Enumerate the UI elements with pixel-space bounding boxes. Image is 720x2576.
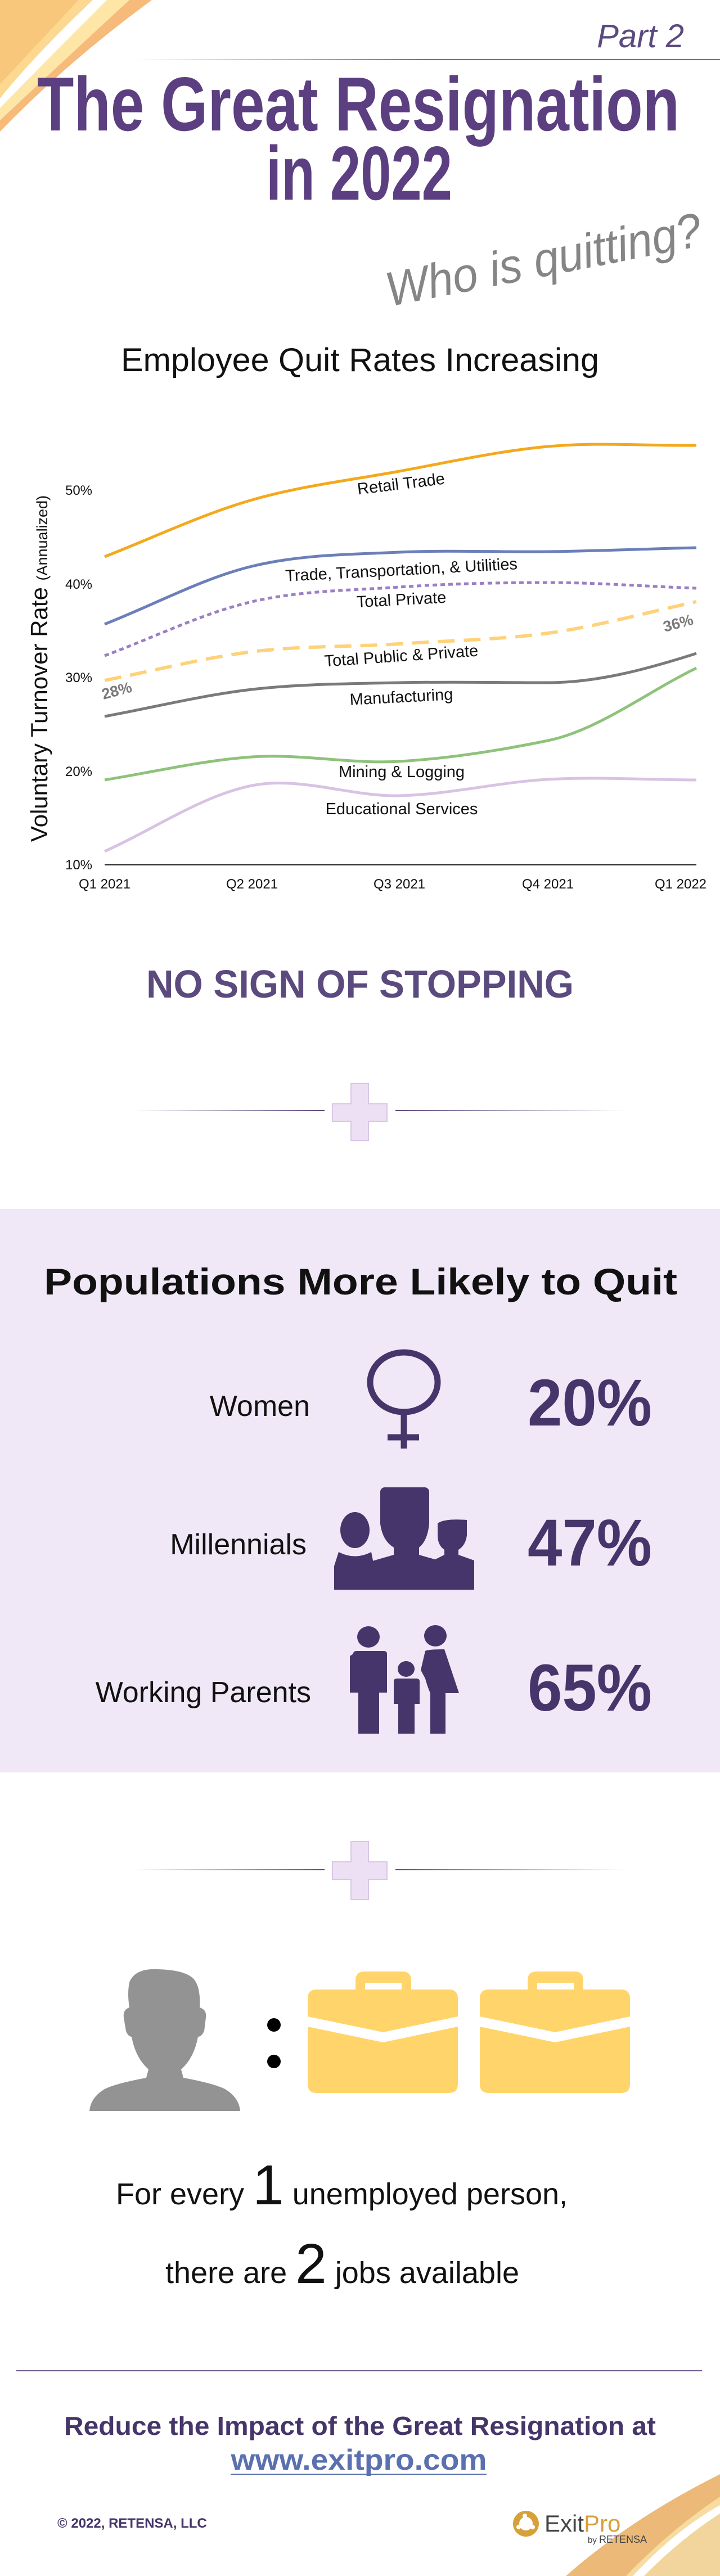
series: total public private — [105, 602, 696, 680]
x axis labels — [79, 877, 706, 892]
row: women — [210, 1352, 652, 1449]
series labels: Manufacturing — [349, 685, 453, 709]
series labels: 36% — [662, 611, 695, 635]
divider plus 1 — [133, 1084, 624, 1140]
icon: colon — [267, 2018, 281, 2068]
title — [37, 61, 680, 216]
footer copyright: © 2022, RETENSA, LLC — [57, 2516, 207, 2531]
series labels: 28% — [100, 679, 134, 703]
chart heading: Employee Quit Rates Increasing — [121, 342, 599, 378]
row: women: Women — [210, 1390, 310, 1423]
series: retail — [105, 444, 696, 557]
icon: briefcase 1 — [308, 1972, 458, 2093]
y axis title: Voluntary Turnover Rate (Annualized) — [26, 495, 52, 842]
call to action: Reduce the Impact of the Great Resignation at — [64, 2411, 656, 2440]
row: millennials: 47% — [528, 1506, 652, 1580]
row: women: 20% — [528, 1366, 652, 1440]
x axis labels: Q1 2021 — [79, 877, 130, 892]
heading: populations: Populations More Likely to Quit — [44, 1261, 677, 1302]
title: in 2022 — [266, 130, 452, 216]
y axis ticks: 30% — [65, 670, 92, 685]
divider plus 2 — [133, 1842, 624, 1900]
logo: exitpro: by RETENSA — [588, 2534, 647, 2545]
icon: female symbol — [370, 1352, 438, 1449]
series labels: Retail Trade — [356, 470, 446, 498]
row: millennials: Millennials — [170, 1528, 307, 1561]
call to action — [64, 2411, 656, 2476]
row: millennials — [170, 1487, 652, 1590]
series labels: Mining & Logging — [339, 763, 465, 781]
part label: Part 2 — [597, 18, 684, 55]
series: education — [105, 778, 696, 851]
text: ratio statement: there are 2 jobs available — [165, 2232, 519, 2295]
row: working parents — [96, 1625, 652, 1734]
icon: family — [350, 1625, 459, 1734]
y axis ticks: 10% — [65, 858, 92, 873]
icon: millennials group — [334, 1487, 474, 1590]
series: manufacturing — [105, 653, 696, 716]
icon: briefcase 2 — [480, 1972, 630, 2093]
logo: exitpro: ExitPro — [544, 2510, 620, 2537]
x axis labels: Q2 2021 — [226, 877, 278, 892]
y axis ticks: 40% — [65, 577, 92, 592]
y axis ticks — [65, 483, 92, 873]
series: total private — [105, 583, 696, 656]
y axis ticks: 20% — [65, 764, 92, 779]
icon: unemployed person — [89, 1969, 240, 2111]
series labels: Total Public & Private — [324, 642, 479, 671]
series: trade — [105, 548, 696, 624]
x axis labels: Q4 2021 — [522, 877, 574, 892]
callout: no sign of stopping: NO SIGN OF STOPPING — [146, 962, 574, 1006]
x axis labels: Q1 2022 — [655, 877, 706, 892]
series labels — [100, 470, 695, 818]
decoration: bottom-right stripes — [566, 2474, 720, 2576]
series: mining — [105, 668, 696, 780]
series labels: Trade, Transportation, & Utilities — [285, 555, 518, 585]
x axis labels: Q3 2021 — [374, 877, 425, 892]
y axis ticks: 50% — [65, 483, 92, 498]
line chart — [26, 444, 706, 892]
text: ratio statement — [116, 2154, 568, 2295]
call to action: www.exitpro.com — [230, 2444, 487, 2476]
text: ratio statement: For every 1 unemployed person, — [116, 2154, 568, 2217]
subtitle: who is quitting: Who is quitting? — [381, 203, 706, 317]
series labels: Educational Services — [326, 800, 478, 818]
row: working parents: 65% — [528, 1651, 652, 1725]
logo: exitpro — [513, 2510, 647, 2545]
decoration: top-left stripes — [0, 0, 152, 132]
row: working parents: Working Parents — [96, 1676, 311, 1709]
series labels: Total Private — [356, 589, 447, 611]
panel: populations — [0, 1209, 720, 1772]
